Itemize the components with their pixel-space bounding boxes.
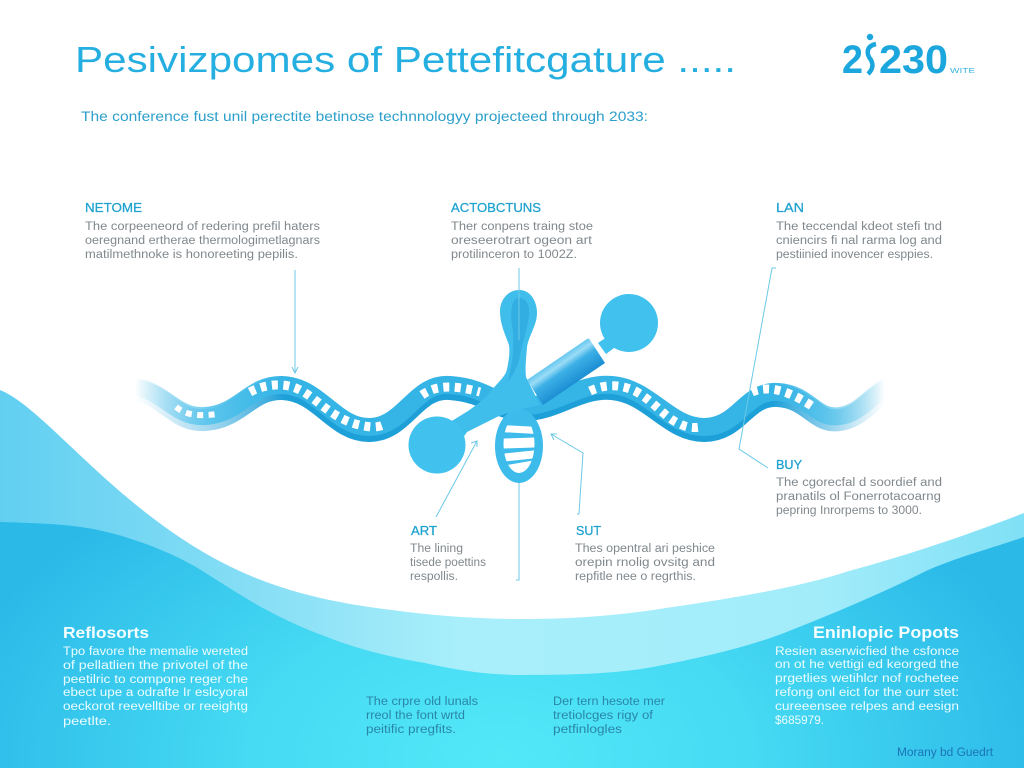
text block: Reflosorts: peetlte.	[63, 716, 111, 728]
text block: NETOME	[85, 201, 320, 261]
text block: middle note two: Der tern hesote mer	[553, 696, 665, 708]
text block: ACTOBCTUNS: Ther conpens traing stoe	[451, 221, 593, 233]
text block: Eninlopic Popots: on ot he vettigi ed keorged the	[775, 659, 959, 671]
text block: LAN: pestiinied inovencer esppies.	[776, 249, 933, 261]
text block: LAN: LAN	[776, 201, 804, 215]
DNA ribbon strand	[135, 385, 885, 431]
text block: Eninlopic Popots: prgetlies wetihlcr nof rochetee	[775, 673, 959, 685]
text block: middle note one: rreol the font wrtd	[366, 710, 465, 722]
text block: Reflosorts: oeckorot reevelltibe or reeightg	[63, 701, 248, 713]
text block: Reflosorts: peetilric to compone reger che	[63, 674, 248, 686]
molecule teardrop arm and junction	[445, 290, 540, 442]
text block: NETOME: oeregnand ertherae thermologimetlagnars	[85, 235, 320, 247]
text block: ART: respollis.	[410, 571, 458, 583]
text block: Reflosorts: of pellatlien the privotel of the	[63, 660, 248, 672]
molecule cylinder	[527, 339, 605, 405]
year badge: 230	[879, 38, 948, 82]
molecule arm highlight	[508, 298, 529, 382]
molecule centre line	[518, 290, 520, 340]
callout arrow: NETOME	[292, 270, 298, 373]
text block: Eninlopic Popots: $685979.	[775, 715, 824, 727]
text block: ART: ART	[411, 524, 437, 538]
text block: SUT	[575, 524, 715, 583]
footer credit: Morany bd Guedrt	[897, 747, 994, 759]
central molecule	[408, 268, 658, 580]
text block: NETOME: The corpeeneord of redering prefil haters	[85, 221, 320, 233]
text block: BUY	[776, 458, 942, 517]
text block: Reflosorts: ebect upe a odrafte Ir eslcyoral	[63, 687, 248, 699]
text block: SUT: Thes opentral ari peshice	[575, 543, 715, 555]
text block: Eninlopic Popots	[775, 624, 959, 727]
text block: Reflosorts: Tpo favore the memalie wereted	[63, 646, 248, 658]
text block: Eninlopic Popots: Eninlopic Popots	[813, 624, 959, 642]
year badge: 2	[842, 38, 863, 82]
text block: ACTOBCTUNS	[451, 201, 593, 261]
text block: Eninlopic Popots: cureeensee relpes and eesign	[775, 701, 959, 713]
year badge: WITE	[950, 68, 975, 75]
callout arrow: ART	[436, 441, 477, 517]
text block: SUT: repfitle nee o regrthis.	[575, 571, 696, 583]
background: pale upper wave	[0, 390, 1024, 768]
text block: middle note one: The crpre old lunals	[366, 696, 478, 708]
callout line: LAN to BUY	[739, 268, 776, 468]
text block: BUY: The cgorecfal d soordief and	[776, 477, 942, 489]
text block: SUT: orepin rnolig ovsitg and	[575, 557, 715, 569]
subtitle: The conference fust unil perectite betinose technnologyy projecteed through 2033:	[81, 109, 648, 124]
text block: Eninlopic Popots: refong onl eict for the ourr stet:	[775, 687, 959, 699]
text block: middle note two	[553, 696, 665, 736]
text block: LAN: The teccendal kdeot stefi tnd	[776, 221, 942, 233]
text block: Reflosorts	[63, 625, 248, 728]
text block: NETOME: matilmethnoke is honoreeting pepilis.	[85, 249, 298, 261]
text block: middle note two: petfinlogles	[553, 724, 622, 736]
text block: BUY: BUY	[776, 458, 803, 472]
text block: ART: The lining	[410, 543, 463, 555]
molecule bottom loop	[495, 409, 543, 483]
molecule right knob	[598, 294, 658, 354]
text block: NETOME: NETOME	[85, 201, 142, 215]
callout line behind molecule: ACTOBCTUNS	[516, 268, 519, 580]
icon: figure in year badge	[867, 34, 876, 74]
text block: ACTOBCTUNS: ACTOBCTUNS	[451, 201, 541, 215]
text block: LAN	[776, 201, 942, 261]
text block: BUY: pranatils ol Fonerrotacoarng	[776, 491, 941, 503]
molecule left knob	[408, 416, 466, 474]
text block: ACTOBCTUNS: protilinceron to 1002Z.	[451, 249, 577, 261]
text block: Eninlopic Popots: Resien aserwicfied the csfonce	[775, 646, 959, 658]
text block: SUT: SUT	[576, 524, 601, 538]
title: Pesivizpomes of Pettefitcgature .....	[75, 39, 736, 80]
background: deep blue lower wave	[0, 522, 1024, 768]
text block: ART: tisede poettins	[410, 557, 486, 569]
text block: middle note one: peitific pregfits.	[366, 724, 456, 736]
callout arrow: SUT	[551, 434, 583, 514]
text block: Reflosorts: Reflosorts	[63, 625, 149, 642]
text block: middle note one	[366, 696, 478, 736]
text block: BUY: pepring Inrorpems to 3000.	[776, 505, 922, 517]
text block: ACTOBCTUNS: oreseerotrart ogeon art	[451, 235, 593, 247]
year badge	[842, 34, 975, 82]
text block: ART	[410, 524, 486, 583]
text block: middle note two: tretiolcges rigy of	[553, 710, 654, 722]
ribbon rungs	[176, 385, 812, 428]
text block: LAN: cniencirs fi nal rarma log and	[776, 235, 942, 247]
